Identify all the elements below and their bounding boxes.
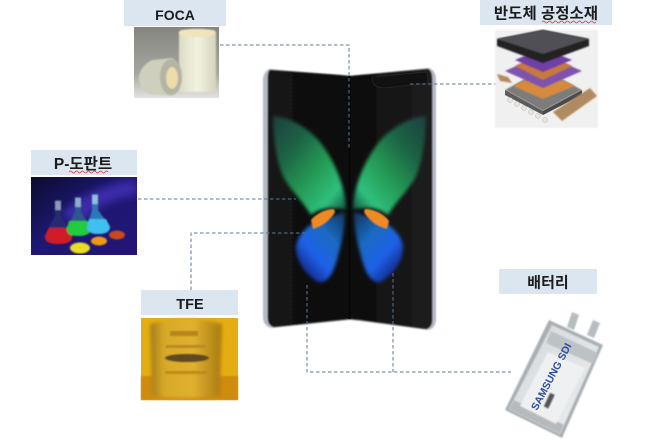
heading: TFE: TFE: [176, 297, 204, 313]
butterfly: [273, 116, 426, 282]
connector: TFE: [191, 233, 306, 290]
image: Samsung SDI battery: [505, 312, 603, 438]
heading: FOCA: FOCA: [155, 7, 195, 23]
hinge: [348, 76, 350, 319]
left orange patch: [311, 209, 335, 229]
heading: semiconductor process materials: 반도체 공정소재: [494, 4, 598, 22]
camera notch: [372, 72, 428, 88]
image: FOCA film rolls: [134, 27, 219, 98]
image: Samsung SDI battery: SAMSUNG SDI: [529, 341, 574, 412]
left lower wing: [296, 212, 345, 282]
left upper wing: [273, 116, 346, 215]
image: fluorescent flasks: [31, 177, 137, 255]
connector: P-dopant: [138, 198, 296, 200]
heading: P-dopant: P-도판트: [54, 155, 112, 173]
phone body: [263, 68, 436, 330]
panel: FOCA: [124, 0, 226, 98]
panel: P-dopant: [31, 150, 137, 255]
panel: battery: [499, 269, 603, 438]
connector: semiconductor materials: [410, 83, 496, 85]
heading: battery: [499, 269, 597, 294]
panel: TFE: [141, 290, 238, 400]
right upper wing: [353, 116, 426, 215]
heading: battery: 배터리: [527, 274, 569, 292]
phone screen: [268, 69, 432, 329]
panel: semiconductor process materials: [480, 0, 612, 128]
phone: foldable smartphone: [263, 68, 436, 330]
image: TFE gold can: [141, 318, 238, 400]
right lower wing: [354, 212, 403, 282]
dashed connectors: [138, 45, 511, 372]
right orange patch: [364, 209, 389, 229]
image: semiconductor layers: [495, 30, 598, 128]
connector: battery: [307, 273, 511, 372]
connector: FOCA: [220, 45, 349, 148]
